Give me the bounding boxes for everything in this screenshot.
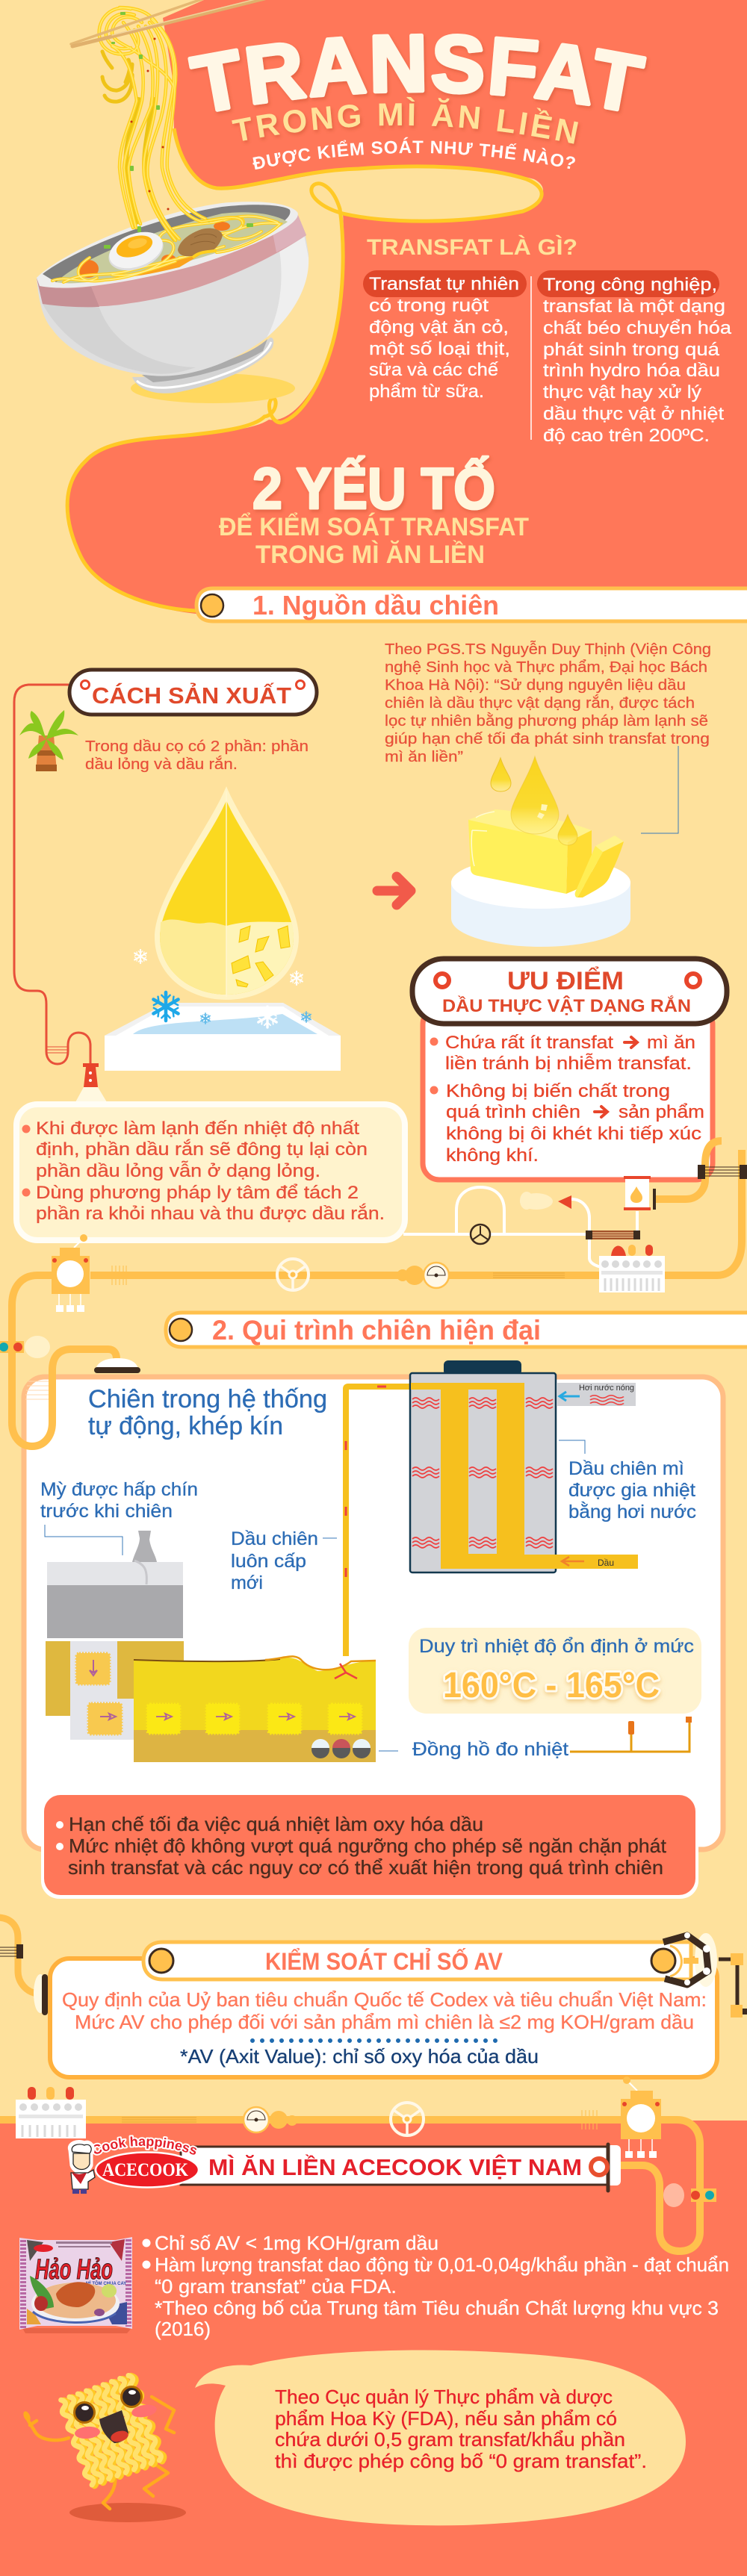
heading: 2 yếu tố: [219, 455, 529, 569]
panel: advantages of solid vegetable oil: [412, 959, 727, 1180]
pipe: red line to valve: [14, 685, 90, 1066]
label: fresh frying oil: luôn cấp: [231, 1551, 306, 1572]
text block: Acecook results: Chỉ số AV < 1mg KOH/gram dầu: [155, 2232, 438, 2254]
label: fresh frying oil: Dầu chiên: [231, 1528, 318, 1549]
icon: control panel: [599, 1245, 665, 1292]
section header: 1. Nguồn dầu chiên: [196, 588, 747, 621]
icon: noodle strands lifted by chopsticks: [99, 7, 243, 240]
label: steamed noodles: trước khi chiên: [40, 1501, 173, 1522]
heading: automated closed system: [88, 1385, 327, 1440]
quote: Assoc. Prof. Nguyen Duy Thinh: Theo PGS.TS Nguyễn Duy Thịnh (Viện Công: [385, 641, 711, 658]
logo: Acecook: [67, 2135, 198, 2194]
panel: advantages of solid vegetable oil: quá trình chiên: [446, 1102, 580, 1122]
callout: stable temperature: [409, 1628, 701, 1714]
icon: valve to cream box: [75, 1063, 107, 1102]
illustration: steamer: [46, 1531, 184, 1740]
quote: Assoc. Prof. Nguyen Duy Thinh: mì ăn liền”: [385, 749, 463, 765]
icon: pressure gauge: [397, 1263, 449, 1288]
callout: FDA speech bubble: phẩm Hoa Kỳ (FDA), nếu sản phẩm có: [275, 2407, 617, 2430]
text block: natural transfat: [363, 270, 527, 402]
quote: Assoc. Prof. Nguyen Duy Thinh: lọc tự nhiên bằng phương pháp làm lạnh sẽ: [385, 712, 708, 729]
quote: Assoc. Prof. Nguyen Duy Thinh: [385, 641, 711, 833]
logo: Acecook: ACECOOK: [102, 2160, 188, 2180]
panel: advantages of solid vegetable oil: DẦU THỰC VẬT DẠNG RẮN: [442, 995, 691, 1016]
illustration: oil droplet being chilled: [105, 786, 341, 1071]
illustration: noodle cake mascot: [22, 2374, 186, 2522]
text block: palm oil two parts: dầu lỏng và dầu rắn.: [85, 756, 238, 773]
heading: 2 yếu tố: TRONG MÌ ĂN LIỀN: [255, 541, 485, 569]
banner: Acecook Vietnam: MÌ ĂN LIỀN ACECOOK VIỆT NAM: [208, 2153, 582, 2180]
logo: Acecook: Cook happiness: [93, 2135, 197, 2156]
label: steam heated oil: được gia nhiệt: [568, 1480, 695, 1501]
panel: coral header background with noodle line: [67, 0, 747, 614]
icon: steering wheel valve: [277, 1259, 309, 1290]
icon: pipe junction box: [52, 1234, 90, 1312]
panel: chilling and centrifuge notes: định, phần dầu rắn sẽ đông tụ lại còn: [36, 1139, 368, 1160]
panel: advantages of solid vegetable oil: không bị ôi khét khi tiếp xúc: [446, 1124, 701, 1144]
text block: Acecook results: Hàm lượng transfat dao động từ 0,01-0,04g/khẩu phần - đạt chuẩn: [155, 2253, 729, 2276]
image: Hao Hao noodle pack: [19, 2237, 132, 2333]
panel: chilling and centrifuge notes: [16, 1104, 405, 1240]
panel: advantages of solid vegetable oil: Chứa rất ít transfat: [445, 1033, 613, 1053]
label: thermometer gauge: [379, 1717, 692, 1760]
panel: advantages of solid vegetable oil: ƯU ĐIỂM: [507, 967, 624, 995]
section header: 1. Nguồn dầu chiên: 1. Nguồn dầu chiên: [252, 590, 499, 620]
text block: Acecook results: “0 gram transfat” của FDA.: [155, 2275, 397, 2297]
callout: stable temperature: 160°C - 165°C: [443, 1666, 660, 1705]
text block: natural transfat: Transfat tự nhiên: [369, 274, 519, 294]
illustration: fryer with noodle cakes: [134, 1656, 376, 1762]
text block: industrial transfat: phát sinh trong quá: [543, 340, 720, 360]
quote: Assoc. Prof. Nguyen Duy Thinh: giúp hạn chế tối đa phát sinh transfat trong: [385, 731, 710, 747]
label: steam heated oil: Dầu chiên mì: [568, 1458, 684, 1479]
title: TRANSFAT: TRANSFAT: [187, 33, 648, 115]
text block: industrial transfat: [537, 270, 732, 446]
section header: 2. Qui trình chiên hiện đại: [166, 1313, 747, 1347]
title: ĐƯỢC KIỂM SOÁT NHƯ THẾ NÀO?: ĐƯỢC KIỂM SOÁT NHƯ THẾ NÀO?: [252, 137, 575, 170]
label: fresh frying oil: mới: [231, 1572, 263, 1593]
text block: natural transfat: động vật ăn cỏ,: [369, 317, 509, 337]
panel: AV index control: [34, 1942, 717, 2077]
panel: heat control notes: [41, 1794, 698, 1899]
heading: Kiểm soát chỉ số AV: KIỂM SOÁT CHỈ SỐ AV: [265, 1948, 503, 1975]
title: TRONG MÌ ĂN LIỀN: TRONG MÌ ĂN LIỀN: [232, 97, 580, 146]
label: steam heated oil: [559, 1440, 696, 1522]
illustration: steam-heated oil tank: Hơi nước nóng: [579, 1384, 634, 1393]
callout: FDA speech bubble: [195, 2351, 686, 2525]
text block: industrial transfat: chất béo chuyển hóa: [543, 318, 732, 338]
image: Hao Hao noodle pack: Hảo Hảo: [35, 2254, 113, 2286]
pipeline: main orange pipe: [90, 1141, 747, 1285]
heading: automated closed system: tự động, khép kín: [88, 1412, 283, 1440]
panel: advantages of solid vegetable oil: mì ăn: [647, 1033, 695, 1053]
illustration: steam-heated oil tank: Dầu: [598, 1558, 614, 1568]
label: Cách sản xuất: [69, 670, 317, 715]
panel: heat control notes: sinh transfat và các nguy cơ có thể xuất hiện trong quá trình chiên: [68, 1856, 663, 1879]
illustration: oil feed pipe: [346, 1387, 409, 1656]
panel: heat control notes: Hạn chế tối đa việc quá nhiệt làm oxy hóa dầu: [69, 1813, 483, 1835]
quote: Assoc. Prof. Nguyen Duy Thinh: Khoa Hà Nội): “Sử dụng nguyên liệu dầu: [385, 677, 686, 694]
illustration: steam-heated oil tank: [410, 1360, 638, 1572]
panel: chilling and centrifuge notes: phần dầu lỏng vẫn ở dạng lỏng.: [36, 1161, 320, 1181]
text block: industrial transfat: dầu thực vật ở nhiệt: [543, 404, 724, 424]
text block: industrial transfat: thực vật hay xử lý: [543, 382, 701, 402]
panel: heat control notes: Mức nhiệt độ không vượt quá ngưỡng cho phép sẽ ngăn chặn phát: [69, 1835, 667, 1857]
callout: stable temperature: Duy trì nhiệt độ ổn định ở mức: [419, 1636, 694, 1657]
panel: modern frying process: [24, 1360, 723, 1849]
heading: Kiểm soát chỉ số AV: [143, 1942, 691, 1979]
panel: chilling and centrifuge notes: Khi được làm lạnh đến nhiệt độ nhất: [36, 1119, 359, 1139]
pipeline: lower orange pipe with gauge and wheel: [0, 2076, 716, 2251]
callout: FDA speech bubble: thì được phép công bố “0 gram transfat”.: [275, 2450, 647, 2472]
arrow: [377, 877, 411, 905]
text block: Acecook results: (2016): [155, 2318, 211, 2340]
pipeline: pipe into AV panel: [0, 1917, 37, 1994]
panel: AV index control: *AV (Axit Value): chỉ số oxy hóa của dầu: [180, 2045, 539, 2068]
panel: AV index control: Mức AV cho phép đối với sản phẩm mì chiên là ≤2 mg KOH/gram dầu: [75, 2011, 694, 2033]
image: Hao Hao noodle pack: MÌ TÔM CHUA CAY: [86, 2280, 126, 2286]
text block: industrial transfat: trình hydro hóa dầu: [543, 361, 720, 381]
panel: advantages of solid vegetable oil: sản phẩm: [619, 1102, 704, 1122]
quote: Assoc. Prof. Nguyen Duy Thinh: chiên là dầu thực vật dạng rắn, được tách: [385, 694, 695, 712]
callout: FDA speech bubble: Theo Cục quản lý Thực phẩm và dược: [275, 2386, 613, 2408]
icon: right side connector: [719, 1953, 747, 2017]
panel: AV index control: Quy định của Uỷ ban tiêu chuẩn Quốc tế Codex và tiêu chuẩn Việt Nam:: [62, 1988, 707, 2011]
text block: industrial transfat: Trong công nghiệp,: [543, 275, 717, 295]
text block: natural transfat: có trong ruột: [369, 296, 489, 316]
icon: chopsticks: [71, 0, 267, 46]
label: fresh frying oil: [231, 1528, 337, 1593]
quote: Assoc. Prof. Nguyen Duy Thinh: nghệ Sinh học và Thực phẩm, Đại học Bách: [385, 659, 707, 676]
callout: FDA speech bubble: chứa dưới 0,5 gram transfat/khẩu phần: [275, 2428, 625, 2451]
illustration: solid vegetable oil butter block: [451, 756, 630, 947]
text block: natural transfat: sữa và các chế: [369, 360, 499, 380]
label: thermometer gauge: Đồng hồ đo nhiệt: [412, 1739, 568, 1760]
section header: 2. Qui trình chiên hiện đại: 2. Qui trình chiên hiện đại: [212, 1315, 541, 1345]
panel: advantages of solid vegetable oil: không khí.: [446, 1145, 539, 1166]
panel: chilling and centrifuge notes: phần ra khỏi nhau và thu được dầu rắn.: [36, 1204, 385, 1224]
text block: natural transfat: một số loại thịt,: [369, 339, 510, 359]
icon: noodle bowl: [37, 202, 309, 403]
text block: Acecook results: [142, 2232, 729, 2340]
panel: chilling and centrifuge notes: Dùng phương pháp ly tâm để tách 2: [36, 1183, 359, 1203]
banner: Acecook Vietnam: [181, 2144, 621, 2191]
text block: industrial transfat: độ cao trên 200ºC.: [543, 426, 710, 446]
text block: palm oil two parts: Trong dầu cọ có 2 phần: phần: [85, 738, 309, 755]
pipeline: left pipe into panel: [0, 1275, 140, 1446]
heading: Transfat là gì: TRANSFAT LÀ GÌ?: [367, 234, 577, 260]
text block: industrial transfat: transfat là một dạng: [543, 296, 725, 317]
text block: Acecook results: *Theo công bố của Trung tâm Tiêu chuẩn Chất lượng khu vực 3: [155, 2297, 719, 2319]
panel: coral footer background: [0, 2121, 747, 2576]
pipeline: white pipes, wheel and boiler: [403, 1176, 651, 1268]
label: steamed noodles: [40, 1479, 198, 1555]
label: steam heated oil: bằng hơi nước: [568, 1501, 696, 1522]
icon: palm tree: [19, 710, 78, 771]
text block: natural transfat: phẩm từ sữa.: [369, 382, 484, 402]
text block: palm oil two parts: [85, 738, 309, 773]
label: steamed noodles: Mỳ được hấp chín: [40, 1479, 198, 1500]
label: Cách sản xuất: CÁCH SẢN XUẤT: [92, 682, 291, 709]
icon: robotic claw: [651, 1932, 717, 1987]
heading: 2 yếu tố: 2 YẾU TỐ: [252, 455, 495, 521]
panel: advantages of solid vegetable oil: Không bị biến chất trong: [446, 1081, 670, 1101]
heading: 2 yếu tố: ĐỂ KIỂM SOÁT TRANSFAT: [219, 513, 529, 541]
heading: automated closed system: Chiên trong hệ thống: [88, 1385, 327, 1413]
panel: advantages of solid vegetable oil: liền tránh bị nhiễm transfat.: [445, 1054, 692, 1074]
